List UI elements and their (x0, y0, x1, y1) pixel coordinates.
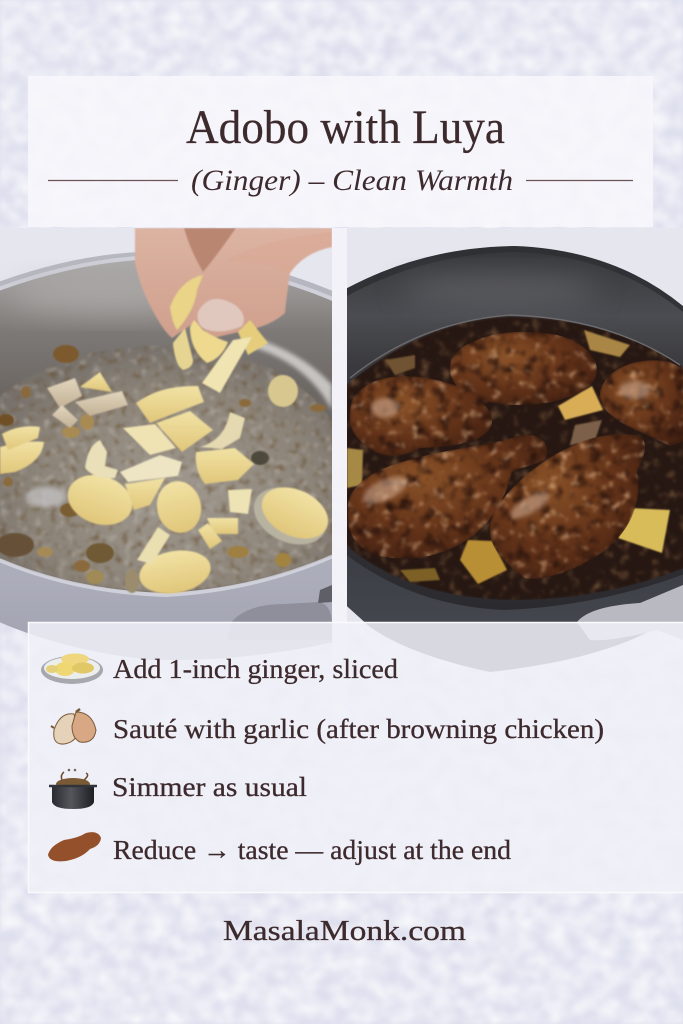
panel: title card (28, 76, 653, 227)
icon: simmering pot (49, 769, 97, 809)
dark pan body (340, 246, 683, 672)
step 1: add ginger: Add 1-inch ginger, sliced (113, 654, 399, 684)
step 3: simmer: Simmer as usual (112, 772, 307, 802)
step 2: saute with garlic: Sauté with garlic (after browning chicken) (113, 714, 604, 744)
glossy highlights (359, 381, 651, 523)
hand holding ginger (135, 228, 332, 393)
heading: Adobo with Luya (186, 101, 505, 154)
panel: recipe steps (28, 622, 683, 893)
photo: ginger added to steel pan (0, 228, 342, 660)
step 3: simmer (49, 769, 307, 809)
step 4: reduce and taste: Reduce → taste — adjust at the end (113, 835, 512, 865)
pan outer body (0, 252, 342, 660)
centre divider strip (332, 228, 347, 742)
pan floor (0, 345, 338, 592)
browned garlic bits (0, 345, 326, 593)
dark pan wall (340, 252, 683, 610)
photo: simmered chicken adobo in dark pan (340, 228, 683, 672)
footer: website name: MasalaMonk.com (223, 915, 466, 947)
sauce pool (340, 316, 683, 600)
dark pan handle (577, 585, 683, 640)
icon: garlic cloves (51, 709, 96, 744)
ginger slices in pan (0, 372, 336, 599)
icon: browned chicken (48, 832, 101, 861)
icon: plate of ginger (41, 654, 103, 684)
pan inner wall (0, 258, 342, 595)
ginger chunks in sauce (347, 330, 670, 584)
pan handle (232, 602, 332, 622)
chicken pieces (348, 332, 683, 579)
subtitle with side rules: (Ginger) – Clean Warmth (191, 164, 513, 197)
